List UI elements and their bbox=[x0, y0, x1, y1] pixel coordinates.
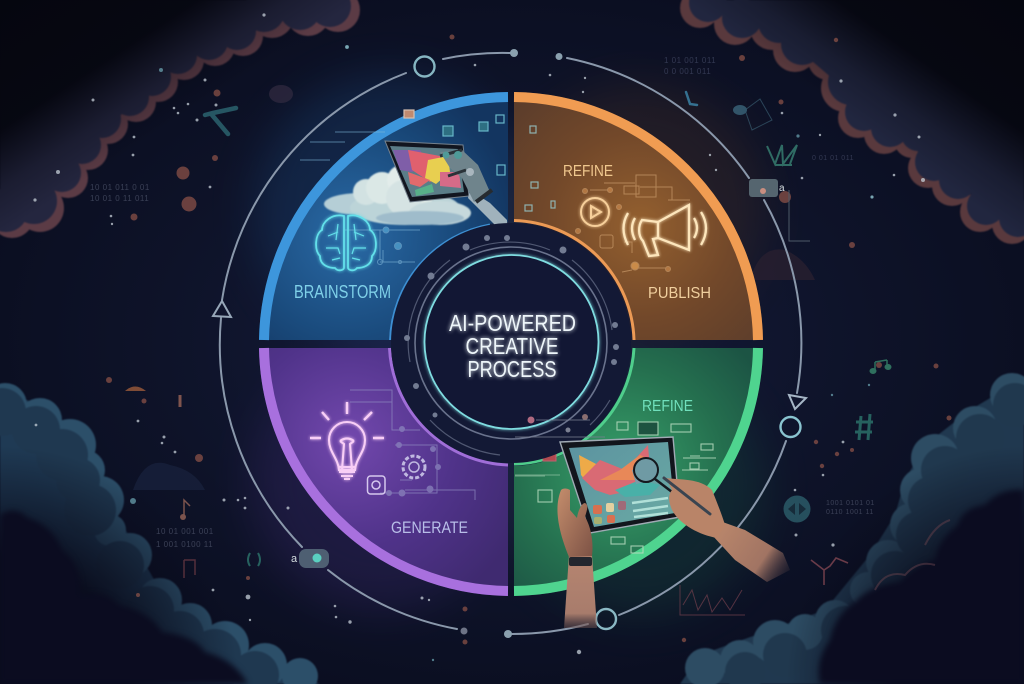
orbit node: top circle bbox=[414, 56, 434, 76]
icon: bracket glyph bbox=[248, 553, 260, 566]
hub nodes bbox=[404, 235, 619, 418]
text: binary lower left: 10 01 001 001 bbox=[156, 527, 214, 536]
small ui icons bbox=[525, 126, 555, 211]
icon: music note dot bbox=[180, 514, 186, 520]
icon: diamond outline bbox=[745, 99, 772, 130]
cloud shade: bottom left bbox=[0, 380, 340, 684]
orbit chip: upper right bbox=[749, 179, 810, 241]
icon: play bbox=[581, 198, 609, 226]
quadrant outer ring: blue bbox=[264, 97, 508, 340]
icon: music notes bbox=[875, 360, 887, 371]
icon: cup bbox=[125, 386, 146, 391]
stylus bbox=[664, 478, 710, 514]
circuit lines bbox=[576, 175, 690, 272]
illustration: hands with tablet bbox=[557, 437, 790, 628]
quadrant inner ring: orange bbox=[514, 220, 634, 340]
icon: teal hook bbox=[686, 92, 697, 105]
label: generate: GENERATE bbox=[391, 519, 468, 537]
left arm bbox=[564, 555, 597, 628]
title: CREATIVE bbox=[466, 333, 558, 359]
icon: robot arm bbox=[440, 150, 508, 236]
center hub bbox=[391, 223, 631, 463]
text: binary top left 2: 10 01 0 11 011 bbox=[90, 194, 149, 203]
quadrant inner ring: purple bbox=[390, 348, 508, 465]
quadrant outer ring: green bbox=[514, 348, 758, 591]
text: binary right: 0 01 01 011 bbox=[812, 155, 854, 162]
hub lower nodes bbox=[515, 414, 605, 437]
icon: dim chart bbox=[680, 585, 745, 615]
cloud: bottom right bbox=[680, 373, 1024, 684]
title bbox=[449, 310, 576, 382]
cloud: top right bbox=[680, 0, 1024, 244]
icon: crown bbox=[767, 145, 797, 165]
icon: cloud bbox=[324, 165, 471, 225]
cloud: top left bbox=[0, 0, 360, 238]
icon: music flag bbox=[184, 560, 195, 578]
quadrant outer ring: orange bbox=[514, 97, 758, 340]
quadrant fill: orange bbox=[514, 92, 763, 340]
outer orbit ring bbox=[220, 53, 801, 634]
arrow: right triangle bbox=[789, 395, 806, 409]
panel: refine and publish bbox=[514, 92, 763, 340]
cloud shade: bottom right bbox=[680, 360, 1024, 684]
orbit chip: lower left bbox=[291, 549, 329, 568]
icon: pink chips bbox=[526, 433, 556, 461]
text: binary top right 2: 0 0 001 011 bbox=[664, 67, 711, 76]
cloud shadow: bottom left bbox=[0, 511, 248, 684]
title: PROCESS bbox=[468, 356, 556, 382]
cloud shadow: bottom right bbox=[819, 490, 1024, 684]
tablet body bbox=[560, 437, 680, 533]
cloud: bottom left bbox=[0, 383, 320, 684]
magnifier bbox=[634, 458, 672, 492]
panel: brainstorm bbox=[259, 92, 508, 340]
icon: lightbulb bbox=[310, 402, 384, 479]
arrow: left triangle bbox=[213, 301, 231, 317]
quadrant fill: purple bbox=[259, 348, 508, 596]
quadrant inner ring: green bbox=[514, 348, 634, 464]
text: binary top left: 10 01 011 0 01 bbox=[90, 183, 150, 192]
small ui icons bbox=[515, 422, 716, 553]
quadrant fill: blue bbox=[259, 92, 508, 340]
tablet screen bbox=[569, 442, 675, 527]
circuit lines bbox=[300, 132, 420, 264]
icon: pink ornament bbox=[178, 395, 182, 407]
hub disc bbox=[391, 223, 631, 463]
quadrant fill: green bbox=[514, 348, 763, 596]
icon: robot tablet bbox=[385, 141, 469, 202]
title: AI-POWERED bbox=[449, 310, 576, 336]
right hand bbox=[666, 478, 725, 538]
cloud shade: top left bbox=[0, 0, 360, 240]
icon: music note left bbox=[184, 500, 190, 517]
label: brainstorm: BRAINSTORM bbox=[294, 282, 391, 302]
text: binary top right: 1 01 001 011 bbox=[664, 56, 716, 65]
text: binary lower left 2: 1 001 0100 11 bbox=[156, 540, 213, 549]
icon: teal tag bbox=[733, 105, 747, 115]
orbit dots bbox=[460, 49, 562, 638]
circuit lines bbox=[350, 390, 475, 500]
label: refine top: REFINE bbox=[563, 163, 613, 180]
small ui icons bbox=[404, 110, 505, 175]
icon: teal tool top left bbox=[205, 108, 236, 134]
text: binary lower right: 1001 0101 01 bbox=[826, 500, 875, 507]
quadrant outer ring: purple bbox=[264, 348, 508, 591]
orbit chip: upper right: a bbox=[779, 183, 785, 194]
icon: pink bird bbox=[811, 558, 848, 585]
icon: planet cross bbox=[788, 503, 806, 515]
icon: teal planet bbox=[784, 496, 810, 522]
hub segmented rings bbox=[408, 242, 612, 455]
icon: dim cloud right bbox=[750, 249, 815, 280]
label: refine green: REFINE bbox=[642, 398, 693, 415]
icon: brain bbox=[316, 215, 376, 270]
cloud shade: top right bbox=[680, 0, 1024, 244]
orbit chip: lower left: a bbox=[291, 553, 298, 565]
dim background icons bbox=[90, 56, 892, 615]
tablet artwork bbox=[579, 445, 668, 524]
cloud rim: bottom right bbox=[875, 520, 950, 590]
orbit node: bottom circle bbox=[596, 609, 616, 629]
wristband bbox=[569, 557, 592, 566]
orbit node: right circle bbox=[780, 417, 800, 437]
quadrant inner ring: blue bbox=[390, 225, 490, 340]
icon: dim planet top left bbox=[269, 85, 293, 103]
left hand bbox=[557, 488, 593, 557]
hub cyan ring bbox=[424, 255, 598, 429]
icon: hash glyph bbox=[855, 414, 873, 440]
right arm bbox=[712, 520, 790, 582]
panel: generate bbox=[259, 348, 508, 596]
icon: music notes dots bbox=[870, 364, 892, 374]
icon: megaphone bbox=[624, 205, 706, 256]
icon: dim cloud left bbox=[133, 463, 205, 490]
wheel ambient glow bbox=[250, 75, 765, 615]
label: publish: PUBLISH bbox=[648, 285, 711, 302]
icon: gear bbox=[403, 456, 425, 478]
text: binary lower right 2: 0110 1001 11 bbox=[826, 509, 874, 516]
panel: refine green bbox=[514, 348, 763, 596]
icon: camera bbox=[368, 476, 385, 494]
